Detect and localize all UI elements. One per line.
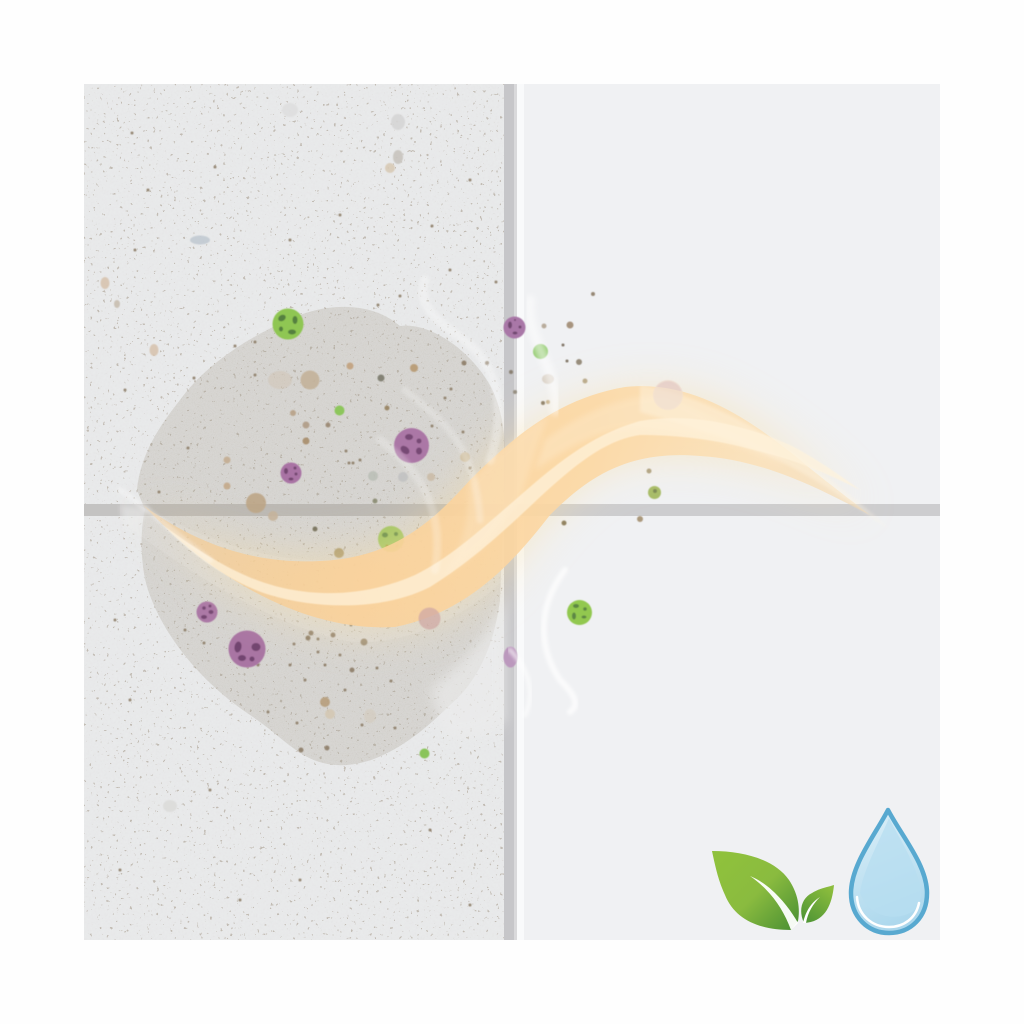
faded purple microbe beneath stream edge <box>418 608 440 630</box>
microbe: ghost purple top of ribbon <box>654 381 682 409</box>
microbe: faded purple oval on joint <box>504 646 518 668</box>
microbe: olive faded <box>648 486 661 499</box>
grout: horizontal joint <box>84 504 940 516</box>
icon: small leaf <box>801 885 834 923</box>
microbe: large purple lower <box>228 630 266 668</box>
right side of the joint <box>566 322 574 328</box>
scattered dirt specks <box>100 103 652 906</box>
icon: green leaves <box>712 851 834 930</box>
microbe: green right <box>567 600 592 625</box>
panel: stained speckled tiles <box>84 84 504 940</box>
microbe: purple on joint <box>504 316 526 338</box>
microbe: large green <box>272 308 304 340</box>
microbe: small purple lower <box>196 602 218 622</box>
grout: vertical joint <box>504 84 524 940</box>
icon: water drop <box>851 810 927 933</box>
microbe: green under ribbon <box>378 526 404 552</box>
light glow around the stream <box>145 389 870 629</box>
icon: large leaf <box>712 851 799 930</box>
white vapour wisps <box>120 280 575 715</box>
panel: clean white tiles <box>517 84 940 940</box>
microbe: tiny green centre <box>334 406 344 416</box>
microbe: tiny green lower <box>420 748 430 758</box>
grime stain <box>120 300 520 770</box>
microbe: large purple centre <box>394 428 429 463</box>
flowing golden cleaning stream <box>143 385 890 627</box>
microbe: small green on joint <box>533 344 548 359</box>
faint ghost bubble over stream <box>653 380 683 410</box>
microbe: small purple centre <box>280 462 302 484</box>
